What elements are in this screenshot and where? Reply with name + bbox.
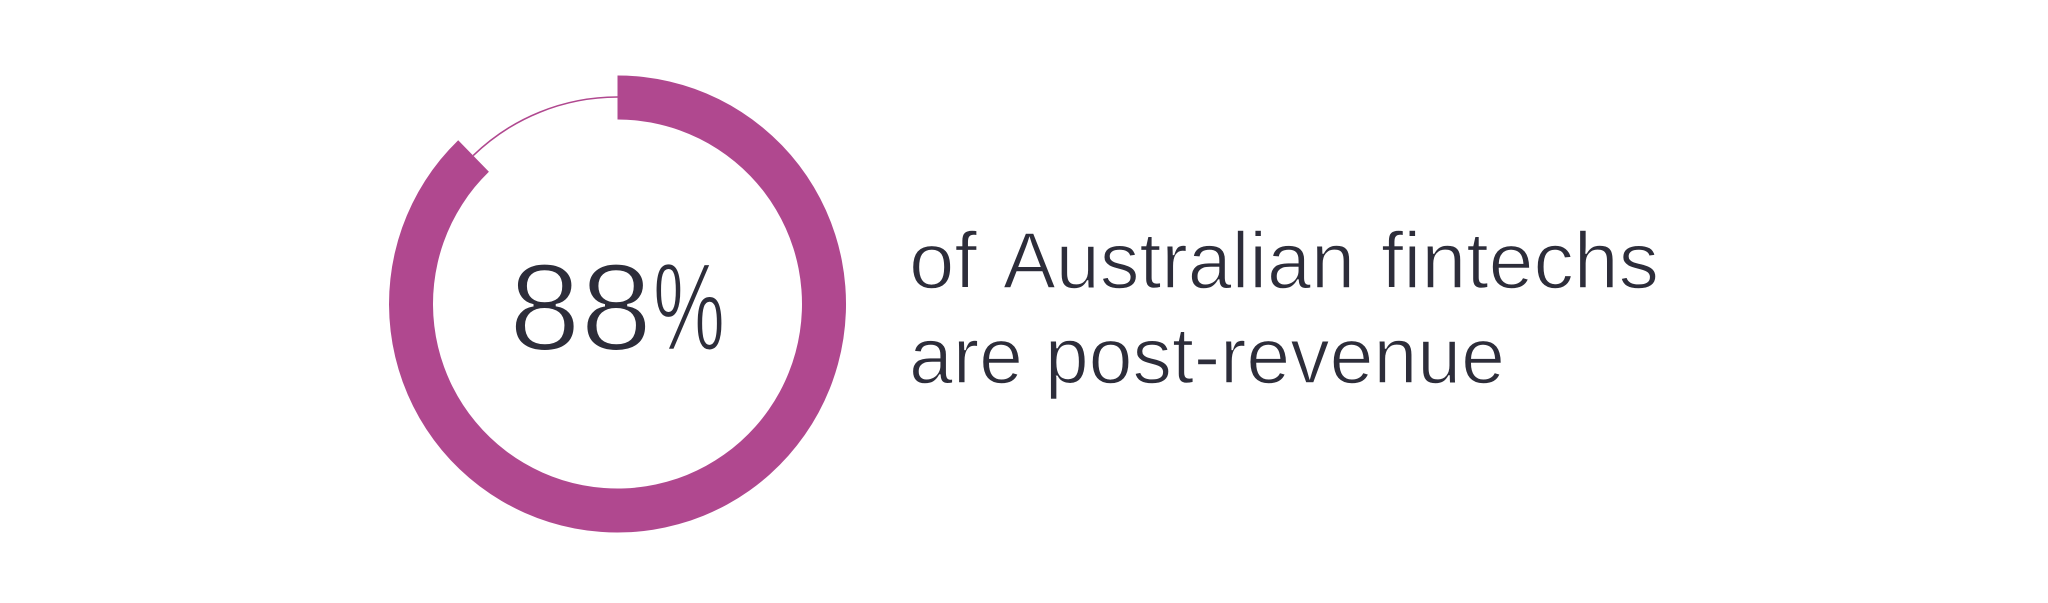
text line 1: fintechs <box>1381 216 1659 305</box>
donut chart: 88 percent <box>389 75 846 532</box>
digits: 88: 88 <box>509 239 652 377</box>
text line 2: are post-revenue <box>909 311 1505 400</box>
ring segment: 88 percent arc <box>389 75 846 532</box>
description text <box>909 216 1659 400</box>
text line 1: of <box>909 216 978 305</box>
percent sign: % <box>653 239 725 377</box>
big number: 88% <box>509 239 725 377</box>
thin arc: remaining 12 percent <box>473 97 618 156</box>
text line 1 <box>909 216 1659 305</box>
text line 1: Australian <box>1003 216 1355 305</box>
